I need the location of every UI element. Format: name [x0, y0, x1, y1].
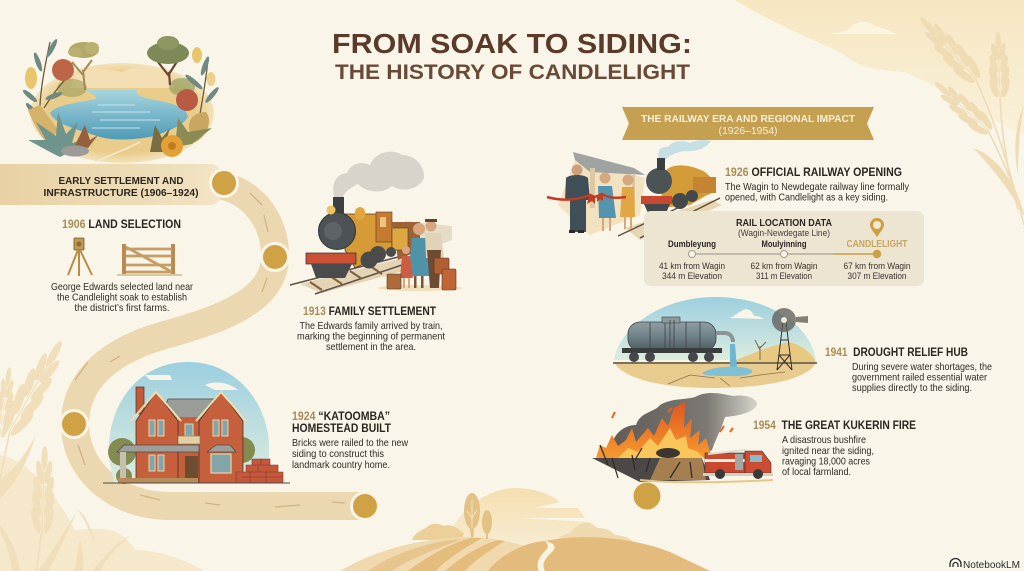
text block: 1924 Katoomba homestead: Bricks were railed to the new [292, 438, 409, 449]
illustration: steam train and family [290, 152, 462, 294]
section banner: early settlement: INFRASTRUCTURE (1906–1924) [44, 187, 198, 199]
station names [668, 239, 908, 250]
logo: NotebookLM: NotebookLM [963, 560, 1020, 571]
title [332, 28, 692, 84]
section banner: early settlement: EARLY SETTLEMENT AND [58, 175, 184, 187]
text block: 1913 family settlement: settlement in the area. [326, 342, 416, 353]
rail line with stops [688, 250, 881, 258]
decoration: bottom centre farmland hills [340, 488, 710, 571]
text block: 1913 family settlement: marking the beginning of permanent [297, 332, 445, 342]
distance data: 41 km from Wagin [659, 261, 725, 271]
text block: 1941 drought relief hub: supplies directly to the siding. [852, 383, 972, 394]
station names: Dumbleyung [668, 239, 716, 249]
title: THE HISTORY OF CANDLELIGHT [335, 61, 690, 84]
locomotive [345, 214, 392, 268]
text block: 1954 great Kukerin fire: ignited near the siding, [782, 446, 874, 457]
text block: 1906 land selection: the district’s first farms. [74, 303, 170, 314]
text block: 1926 official railway opening [725, 165, 910, 204]
distance data [659, 261, 910, 281]
station names: Moulyinning [762, 239, 806, 249]
text block: 1924 Katoomba homestead [292, 409, 409, 471]
illustration: railway opening ceremony [547, 140, 722, 240]
distance data: 311 m Elevation [756, 271, 812, 281]
title: FROM SOAK TO SIDING: [332, 28, 692, 59]
icon: location pin [870, 218, 884, 237]
track [300, 258, 414, 293]
text block: 1906 land selection [51, 217, 194, 314]
text block: 1906 land selection: the Candlelight soak to establish [57, 292, 187, 304]
text block: 1926 official railway opening: The Wagin to Newdegate railway line formally [725, 182, 910, 193]
text block: 1906 land selection: 1906 LAND SELECTION [62, 217, 181, 231]
distance data: 62 km from Wagin [750, 261, 818, 271]
text block: 1924 Katoomba homestead: siding to construct this [292, 449, 384, 460]
text block: 1941 drought relief hub: government railed essential water [852, 372, 988, 384]
text block: 1926 official railway opening: 1926 OFFICIAL RAILWAY OPENING [725, 165, 902, 179]
distance data: 307 m Elevation [848, 271, 906, 281]
carriages [405, 221, 452, 255]
text block: 1954 great Kukerin fire [753, 418, 916, 478]
text block: 1913 family settlement [297, 304, 445, 353]
text block: 1954 great Kukerin fire: 1954 THE GREAT KUKERIN FIRE [753, 418, 916, 432]
panel: rail location data: RAIL LOCATION DATA [736, 218, 832, 229]
node 1 [210, 170, 238, 196]
winding timeline road [0, 164, 378, 520]
text block: 1924 Katoomba homestead: 1924 “KATOOMBA” [292, 409, 390, 423]
section banner: railway era [622, 107, 874, 140]
section banner: early settlement [0, 164, 225, 205]
distance data: 67 km from Wagin [844, 261, 910, 271]
panel: rail location data: (Wagin-Newdegate Line) [738, 228, 830, 238]
text block: 1906 land selection: George Edwards selected land near [51, 282, 194, 293]
panel: rail location data [644, 211, 924, 286]
section banner: railway era: THE RAILWAY ERA AND REGIONAL IMPACT [641, 114, 855, 125]
family [378, 285, 462, 291]
smoke [333, 152, 424, 197]
icon: surveyor tripod [68, 238, 92, 276]
illustration: bushfire and fire truck [592, 393, 773, 482]
illustration: brick homestead [103, 362, 290, 484]
decoration: top right wheat [912, 10, 1024, 225]
text block: 1941 drought relief hub: During severe water shortages, the [852, 362, 992, 373]
text block: 1924 Katoomba homestead: HOMESTEAD BUILT [292, 421, 392, 435]
text block: 1941 drought relief hub: 1941 DROUGHT RELIEF HUB [825, 345, 968, 359]
node 2 [262, 244, 288, 270]
text block: 1924 Katoomba homestead: landmark country home. [292, 460, 390, 471]
node 4 [352, 492, 378, 520]
text block: 1954 great Kukerin fire: ravaging 18,000 acres [782, 456, 870, 468]
node 5 [634, 482, 660, 510]
illustration: water tanker and windmill in drought [613, 297, 817, 388]
station names: CANDLELIGHT [846, 239, 908, 250]
text block: 1954 great Kukerin fire: A disastrous bushfire [782, 435, 866, 446]
icon: farm gate [117, 244, 182, 275]
text block: 1913 family settlement: The Edwards family arrived by train, [300, 321, 442, 332]
distance data: 344 m Elevation [662, 271, 722, 281]
decoration: bottom left hill and wheat [0, 335, 205, 571]
text block: 1941 drought relief hub [825, 345, 992, 394]
text block: 1954 great Kukerin fire: of local farmland. [782, 467, 851, 478]
section banner: railway era: (1926–1954) [718, 126, 778, 137]
node 3 [60, 410, 88, 438]
illustration: soak with native plants [21, 36, 220, 163]
decoration: top right sky and hill [735, 0, 1024, 135]
text block: 1926 official railway opening: opened, with Candlelight as a key siding. [725, 192, 888, 204]
text block: 1913 family settlement: 1913 FAMILY SETTLEMENT [303, 304, 437, 318]
